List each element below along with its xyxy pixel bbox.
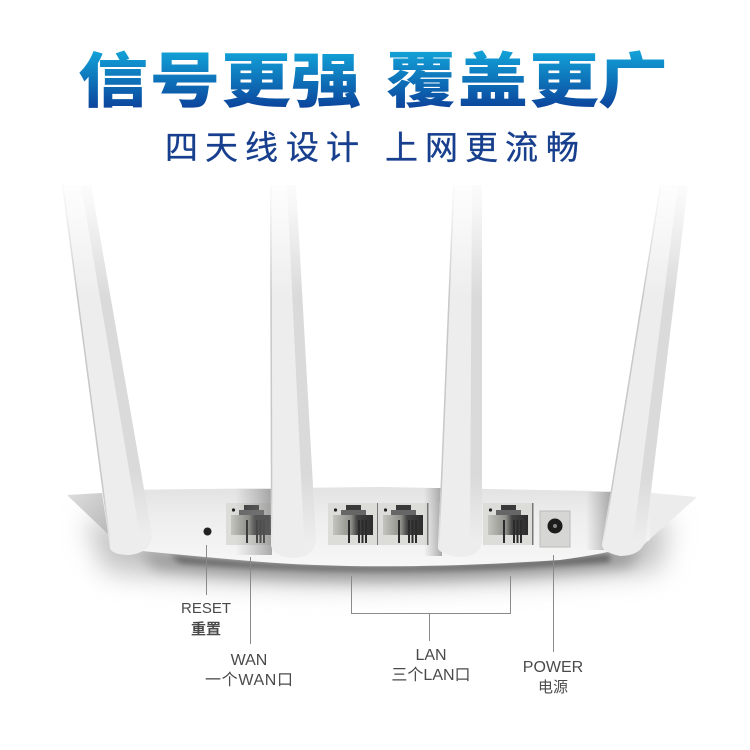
icon: LAN port 2 — [378, 503, 428, 545]
label: RESET: 重置 — [191, 620, 221, 638]
antenna 4 — [602, 185, 688, 556]
antenna top fade — [40, 172, 710, 297]
reset line — [206, 545, 208, 595]
antenna 2 — [270, 185, 316, 558]
icon: power socket — [540, 511, 570, 547]
icon: LAN port 1 — [328, 503, 378, 545]
icon: LAN port 3 — [483, 503, 534, 545]
label: LAN — [391, 647, 471, 684]
WAN line — [250, 557, 252, 644]
desk shadow under router — [85, 520, 670, 585]
label: POWER: POWER — [523, 659, 583, 676]
label: WAN: 一个WAN口 — [205, 671, 293, 689]
label: WAN — [205, 652, 293, 689]
icon: reset hole — [204, 528, 212, 536]
icon: WAN port — [226, 503, 276, 545]
router wings — [67, 492, 697, 548]
LAN bracket — [352, 576, 510, 641]
label: WAN: WAN — [231, 652, 267, 669]
subtitle: 四天线设计上网更流畅 — [165, 121, 579, 169]
router body — [112, 487, 650, 566]
title: 信号更强覆盖更广 — [78, 32, 668, 119]
label: LAN: 三个LAN口 — [391, 666, 471, 684]
label: POWER: 电源 — [538, 679, 568, 696]
antenna cast shadows on body — [235, 488, 612, 556]
label: RESET: RESET — [181, 600, 231, 617]
power line — [552, 555, 554, 652]
router — [40, 172, 710, 585]
label: POWER — [523, 659, 583, 696]
leader lines — [206, 545, 554, 652]
label: LAN: LAN — [415, 647, 447, 664]
label: RESET — [181, 600, 231, 638]
antenna 1 — [62, 185, 152, 555]
antenna 3 — [438, 185, 482, 557]
